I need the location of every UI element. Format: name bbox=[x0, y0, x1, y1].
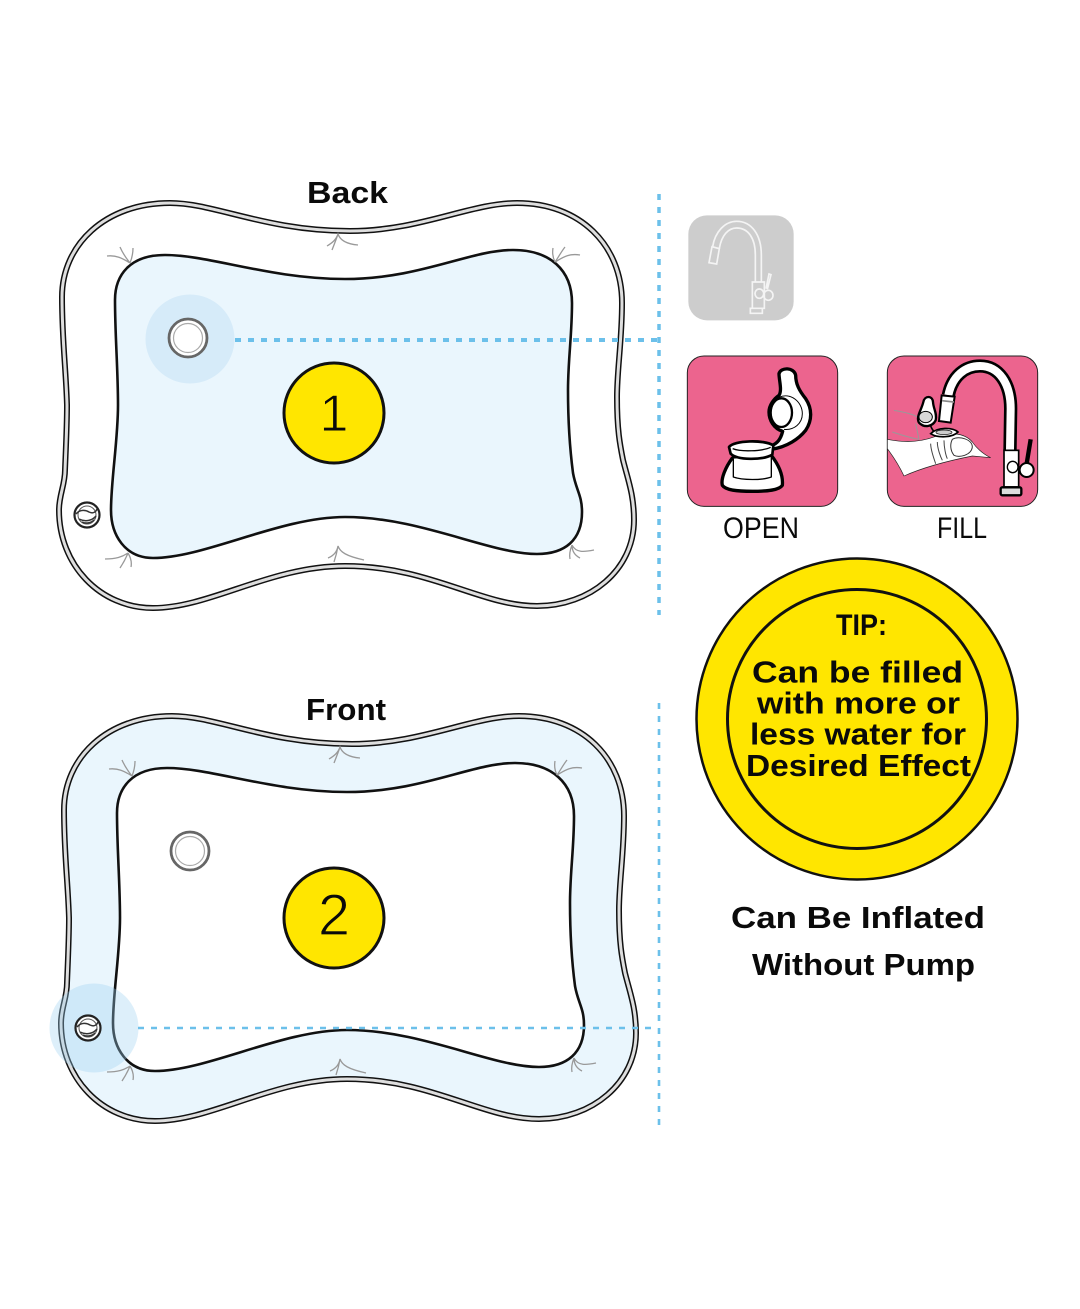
panel: back view of mat bbox=[59, 203, 634, 608]
wrinkle marks: front bbox=[107, 747, 596, 1081]
label: FILL: FILL bbox=[937, 512, 987, 545]
highlight: fill port bbox=[146, 294, 234, 384]
step number 1 bbox=[284, 363, 384, 463]
caption: can be inflated without pump bbox=[731, 900, 985, 982]
dotted connector: back horizontal bbox=[235, 338, 662, 342]
label: OPEN: OPEN bbox=[723, 512, 799, 545]
step number 2: 2 bbox=[318, 883, 350, 948]
tip text: less water for bbox=[750, 716, 966, 752]
icon: fill port front bbox=[171, 832, 209, 870]
faucet bbox=[948, 366, 1011, 450]
cap bbox=[918, 397, 936, 426]
heading: Back: Back bbox=[307, 175, 389, 210]
wrinkle marks: back bbox=[105, 234, 594, 568]
dotted connector: front vertical bbox=[658, 703, 660, 1126]
tip text: with more or bbox=[756, 686, 960, 720]
step number 2 bbox=[284, 868, 384, 968]
caption: can be inflated without pump: Without Pump bbox=[752, 947, 975, 982]
icon: open cap bbox=[687, 356, 838, 506]
dotted connector: front horizontal bbox=[138, 1027, 656, 1029]
heading: Front: Front bbox=[306, 692, 386, 727]
icon: fill port bbox=[169, 319, 207, 357]
mat outline: back bbox=[59, 203, 634, 608]
mat shape: front bbox=[61, 716, 636, 1121]
step number 1: 1 bbox=[320, 385, 348, 443]
hand bbox=[887, 434, 991, 476]
highlight: air valve bbox=[50, 984, 138, 1072]
tip text: Can be filled bbox=[752, 654, 963, 690]
callout: tip badge bbox=[696, 558, 1018, 880]
tip heading: TIP: bbox=[836, 609, 887, 642]
icon: grey faucet bbox=[688, 215, 794, 320]
tip text: Desired Effect bbox=[746, 748, 971, 783]
icon: air valve front bbox=[76, 1016, 100, 1040]
panel: front view of mat bbox=[50, 716, 636, 1121]
dotted connector: back vertical bbox=[657, 194, 661, 615]
tip text bbox=[746, 654, 971, 783]
icon: air valve bbox=[74, 502, 100, 528]
water area: back bbox=[111, 250, 582, 558]
icon: fill faucet with hand bbox=[887, 356, 1038, 506]
caption: can be inflated without pump: Can Be Inflated bbox=[731, 900, 985, 935]
